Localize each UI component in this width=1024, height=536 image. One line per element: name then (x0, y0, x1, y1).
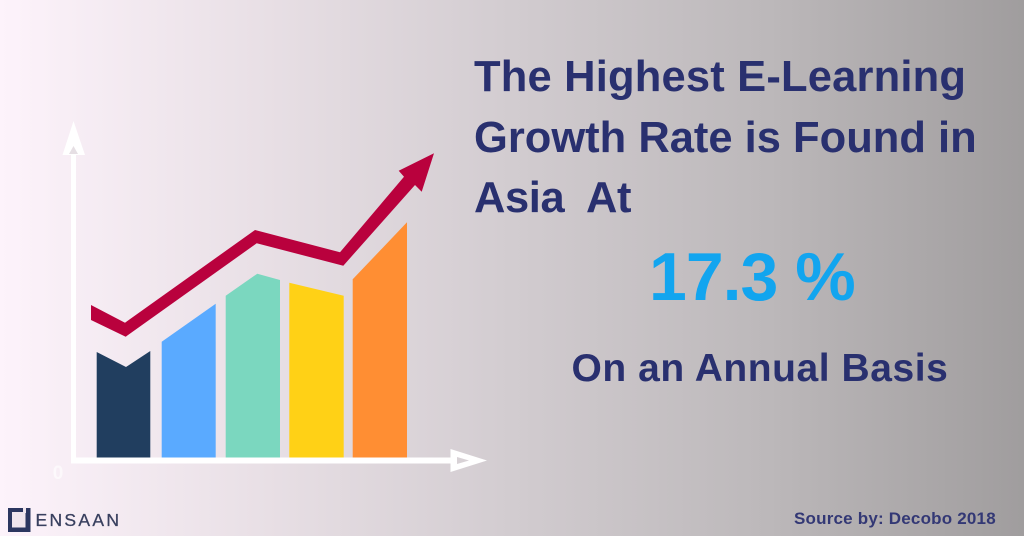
heading: Growth Rate is Found in (474, 114, 977, 162)
y axis arrow (62, 121, 85, 463)
icon: logo square (8, 508, 30, 532)
heading (474, 52, 977, 222)
heading: Asia At (474, 174, 631, 222)
bar 1 navy (97, 351, 150, 458)
bar 5 orange (353, 222, 407, 458)
logo wordmark: ENSAAN (36, 510, 121, 530)
key statistic: 17.3 % (649, 239, 855, 315)
bar 3 green (226, 274, 280, 458)
bar 2 blue (162, 304, 216, 458)
x axis arrow (71, 449, 487, 472)
axis origin label: 0 (53, 463, 63, 484)
subheading: On an Annual Basis (572, 347, 948, 390)
trend line arrow (91, 153, 434, 337)
source note: Source by: Decobo 2018 (794, 509, 996, 528)
bar 4 yellow (289, 283, 344, 458)
logo (8, 508, 121, 532)
heading: The Highest E-Learning (474, 52, 966, 100)
